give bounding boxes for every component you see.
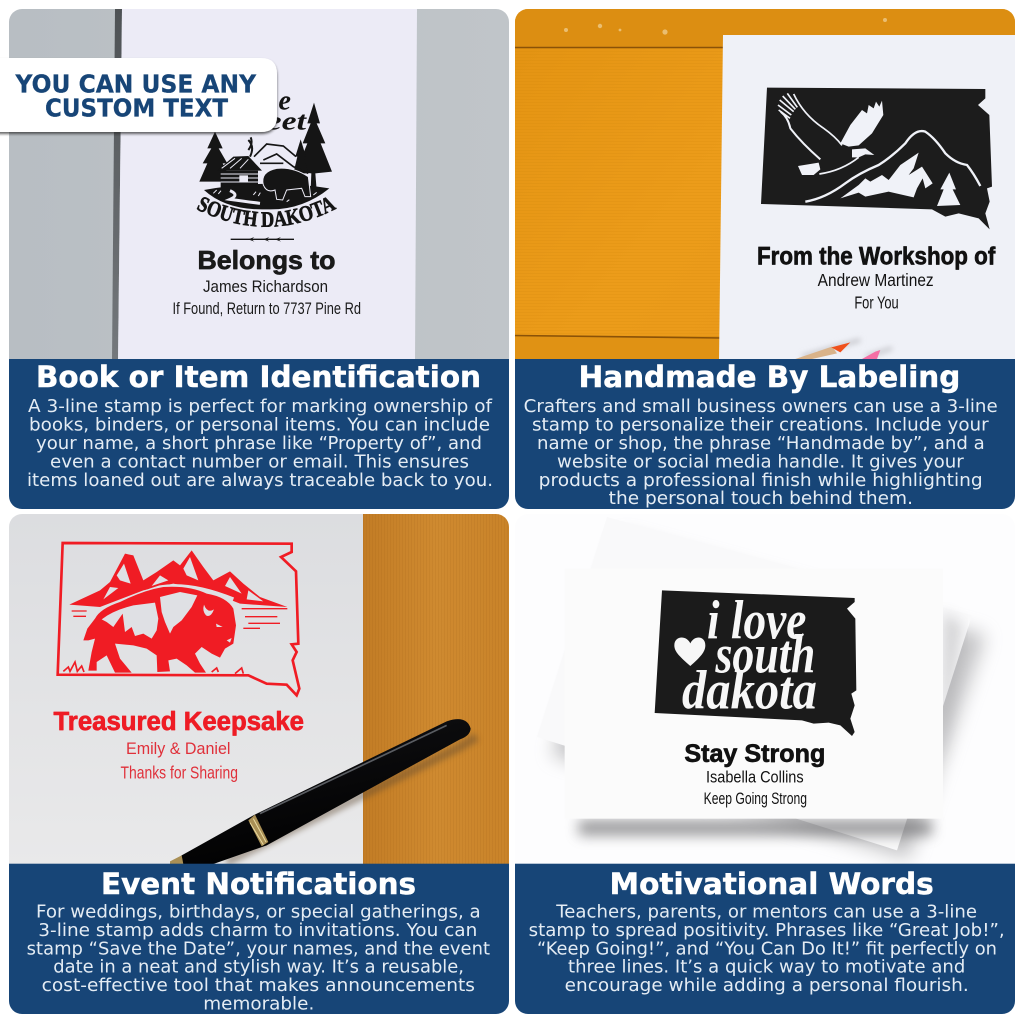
body text: the personal touch behind them. <box>609 489 913 509</box>
body text: items loaned out are always traceable back to you. <box>27 471 493 491</box>
stamp text: belongs to <box>172 245 361 318</box>
stamp art: bison in state outline <box>58 543 299 695</box>
body text: encourage while adding a personal flourish. <box>565 976 969 996</box>
photo: stacked white cards <box>545 608 992 864</box>
label: you can use any custom text <box>0 58 277 132</box>
stamp text: from the workshop of: From the Workshop of <box>757 243 996 270</box>
stamp text: treasured keepsake: Emily & Daniel <box>126 739 230 758</box>
body text <box>27 903 490 1014</box>
body text: date in a neat and stylish way. It’s a reusable, <box>53 958 464 978</box>
body text: memorable. <box>203 994 314 1014</box>
photo: paper beside wood <box>9 514 509 866</box>
stamp art: i love south dakota state outline <box>655 590 856 736</box>
stamp text: belongs to: If Found, Return to 7737 Pine Rd <box>172 299 361 318</box>
heading: Event Notifications <box>101 867 416 901</box>
stamp text: from the workshop of <box>758 246 996 308</box>
stamp text: stay strong: Isabella Collins <box>706 768 804 787</box>
body text: three lines. It’s a quick way to motivate and <box>568 958 965 978</box>
stamp art: cabin and bison emblem <box>196 96 337 242</box>
stamp text: from the workshop of: For You <box>854 293 899 313</box>
body text: your name, a short phrase like “Property of”, and <box>36 434 482 454</box>
stamp art: i love south dakota state outline: i love <box>707 590 806 651</box>
body text: 3-line stamp adds charm to invitations. You can <box>38 921 477 941</box>
stamp art: eagle and mountains in state outline <box>761 88 992 229</box>
stamp art: i love south dakota state outline: south <box>715 624 815 685</box>
stamp text: treasured keepsake: Thanks for Sharing <box>120 762 238 782</box>
body text: Teachers, parents, or mentors can use a 3-line <box>555 903 977 923</box>
body text: Crafters and small business owners can use a 3-line <box>524 397 998 417</box>
icon: black pen <box>170 719 477 864</box>
panel: motivational words <box>515 590 1015 1014</box>
body text: stamp to spread positivity. Phrases like “Great Job!”, <box>529 921 1005 941</box>
panel: event notifications <box>9 514 509 1015</box>
label: you can use any custom text: CUSTOM TEXT <box>45 94 228 123</box>
stamp text: stay strong: Stay Strong <box>684 741 825 768</box>
caption band <box>9 864 509 1015</box>
stamp art: cabin and bison emblem: e <box>278 85 291 116</box>
body text: For weddings, birthdays, or special gatherings, a <box>36 903 481 923</box>
body text: website or social media handle. It gives your <box>557 452 965 472</box>
stamp art: cabin and bison emblem: eet <box>267 105 308 135</box>
photo: paper on orange wood <box>515 9 1020 361</box>
body text: products a professional finish while highlighting <box>539 471 983 491</box>
panel: book or item identification <box>9 9 509 509</box>
colored pencils <box>795 340 892 359</box>
heading: Motivational Words <box>610 867 934 901</box>
body text: books, binders, or personal items. You can include <box>29 416 490 436</box>
body text: cost-effective tool that makes announcements <box>42 976 475 996</box>
stamp art: i love south dakota state outline: dakota <box>682 660 817 721</box>
panel: handmade by labeling <box>515 9 1020 509</box>
stamp text: stay strong <box>684 741 825 808</box>
body text: stamp “Save the Date”, your names, and the event <box>27 939 490 959</box>
caption band <box>515 359 1015 509</box>
body text: even a contact number or email. This ensures <box>50 452 469 472</box>
body text <box>529 903 1005 996</box>
stamp text: from the workshop of: Andrew Martinez <box>818 270 934 290</box>
body text <box>27 397 493 491</box>
body text: stamp to personalize their creations. Include your <box>532 416 990 436</box>
stamp text: belongs to: James Richardson <box>203 277 328 296</box>
stamp text: stay strong: Keep Going Strong <box>704 789 807 808</box>
heading: Book or Item Identification <box>36 360 481 394</box>
stamp text: treasured keepsake <box>54 708 304 782</box>
body text: “Keep Going!”, and “You Can Do It!” fit perfectly on <box>537 939 997 959</box>
caption band <box>9 359 509 509</box>
photo: paper on gray background <box>9 9 509 361</box>
body text <box>524 397 998 509</box>
body text: name or shop, the phrase “Handmade by”, and a <box>537 434 985 454</box>
stamp text: belongs to: Belongs to <box>198 245 336 275</box>
stamp art: cabin and bison emblem: SOUTH DAKOTA <box>196 197 337 228</box>
body text: A 3-line stamp is perfect for marking ownership of <box>28 397 493 417</box>
stamp text: treasured keepsake: Treasured Keepsake <box>54 708 304 736</box>
caption band <box>515 864 1015 1015</box>
icon: heart <box>674 638 705 666</box>
heading: Handmade By Labeling <box>579 360 960 394</box>
label: you can use any custom text: YOU CAN USE ANY <box>15 70 257 99</box>
